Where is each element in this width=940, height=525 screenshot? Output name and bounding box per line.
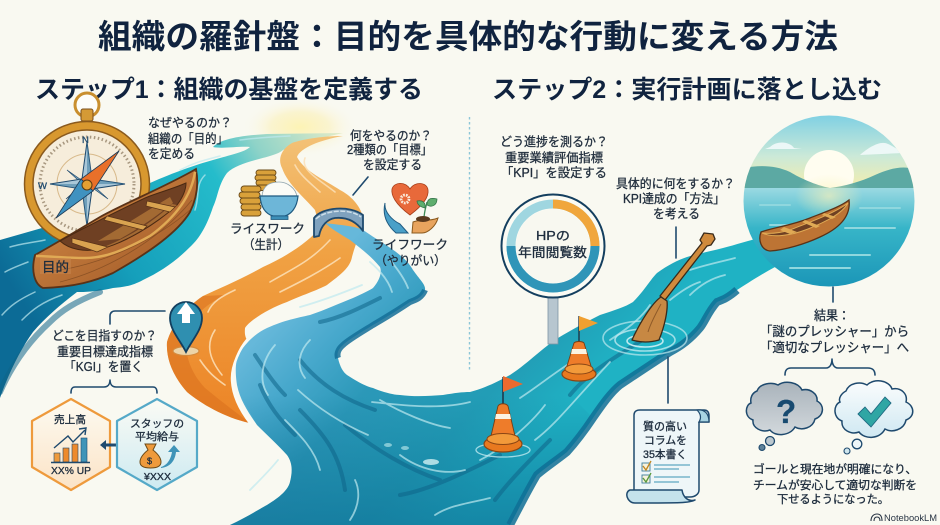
text: conclusion: ゴールと現在地が明確になり、 [753,462,917,476]
text: rice work: （生計） [243,237,289,252]
text: what - two goals: 何をやるのか？ [350,128,432,143]
text: why - purpose: なぜやるのか？ [148,116,232,130]
connector: pin to KGI text [110,311,165,324]
label: yen amount: ¥XXX [143,472,171,483]
label: write 35 quality columns [643,419,687,461]
leader line: goals to bridge [353,177,368,195]
leader line: lake to result [832,287,834,302]
text: result: 結果： [814,308,850,323]
leader line: paddle to scroll [667,357,669,403]
label: write 35 quality columns: 質の高い [643,419,687,433]
text: why - purpose [148,116,232,161]
text: where - KGI: 「KGI」を置く [64,360,143,374]
text: life work [372,238,448,268]
text: how to measure - KPI: 重要業績評価指標 [505,150,603,165]
text: rice work: ライスワーク [230,222,305,236]
icon: checklist [642,461,690,483]
text: conclusion: 下せるようになった。 [777,493,889,506]
text: what to do - method: 具体的に何をするか？ [616,176,735,191]
text: conclusion [753,462,917,506]
panel: goal lake scene [742,115,916,288]
text: how to measure - KPI: 「KPI」を設定する [501,166,607,180]
bracket: KGI to two indicators [71,380,157,393]
icon: compass: N [82,135,89,146]
arrow: two-way relationship [100,440,127,450]
icon: buoy with flag, near [476,376,530,457]
label: staff salary [130,418,184,443]
label: HP annual page views [518,229,587,260]
text: life work: ライフワーク [372,238,448,252]
dashed divider between steps [468,117,470,371]
panel: action scroll [627,410,709,503]
text: what - two goals: 2種類の「目標」 [347,143,432,157]
icon: coins and rice bowl [239,170,298,220]
panel: sales hexagon [32,399,110,490]
river: turquoise purpose river [0,133,343,398]
label: staff salary: スタッフの [130,418,184,430]
text: what to do - method: KPI達成の「方法」 [623,191,725,206]
text: where - KGI: 重要目標達成指標 [57,344,153,359]
text: why - purpose: 組織の「目的」 [148,131,228,146]
text: where - KGI [52,328,157,374]
text: life work: （やりがい） [375,253,446,268]
heading: step 2: ステップ2：実行計画に落とし込む [492,76,882,104]
river: blue life-work river flowing to the goal [230,223,800,525]
leader line: method to paddle [675,227,677,258]
text: what - two goals [347,128,432,172]
label: write 35 quality columns: 35本書く [643,447,687,461]
icon: KGI map pin [170,302,202,356]
chart: KPI gauge sign [502,194,604,344]
icon: river fork bridge [314,209,363,237]
icon: heart, gear, hands and sprout [384,183,438,233]
text: how to measure - KPI [500,135,608,180]
icon: compass [24,93,150,246]
icon: buoy with flag, far [562,316,598,381]
title: 組織の羅針盤：目的を具体的な行動に変える方法 [98,18,838,55]
label: XX% UP: XX% UP [51,465,91,477]
text: why - purpose: を定める [148,147,195,161]
icon: wooden canoe labelled purpose [33,169,197,288]
icon: clear check cloud [835,381,913,454]
icon: paddle with ripples [603,233,715,355]
chart: rising bars with arrow [51,428,90,462]
text: what to do - method [616,176,735,221]
panel: staff salary hexagon [117,399,197,490]
label: staff salary: 平均給与 [135,430,179,443]
text: result: 「適切なプレッシャー」へ [760,340,909,355]
text: what to do - method: を考える [653,207,700,221]
text: how to measure - KPI: どう進捗を測るか？ [500,135,608,149]
icon: grey question cloud: ? [776,393,796,430]
river: orange rice-work river [167,136,363,423]
icon: money bag: $ [147,456,152,466]
icon: grey question cloud [746,382,822,450]
bracket: result to two clouds [785,359,875,375]
text: what - two goals: を設定する [363,158,422,172]
sun glow on the horizon [242,97,358,157]
icon: canoe reaching the goal [760,200,849,251]
label: HP annual page views: 年間閲覧数 [518,245,587,260]
label: write 35 quality columns: コラムを [644,434,687,447]
text: result: 「謎のプレッシャー」から [760,324,909,339]
text: result [760,308,909,355]
boat label: purpose: 目的 [42,260,69,275]
text: where - KGI: どこを目指すのか？ [52,328,157,343]
watermark: NotebookLM: NotebookLM [884,513,937,524]
label: HP annual page views: HPの [536,229,570,243]
heading: step 1: ステップ1：組織の基盤を定義する [35,76,423,104]
text: conclusion: チームが安心して適切な判断を [753,478,917,492]
icon: compass: W [38,181,47,192]
label: sales: 売上高 [54,413,86,426]
text: rice work [230,222,305,252]
